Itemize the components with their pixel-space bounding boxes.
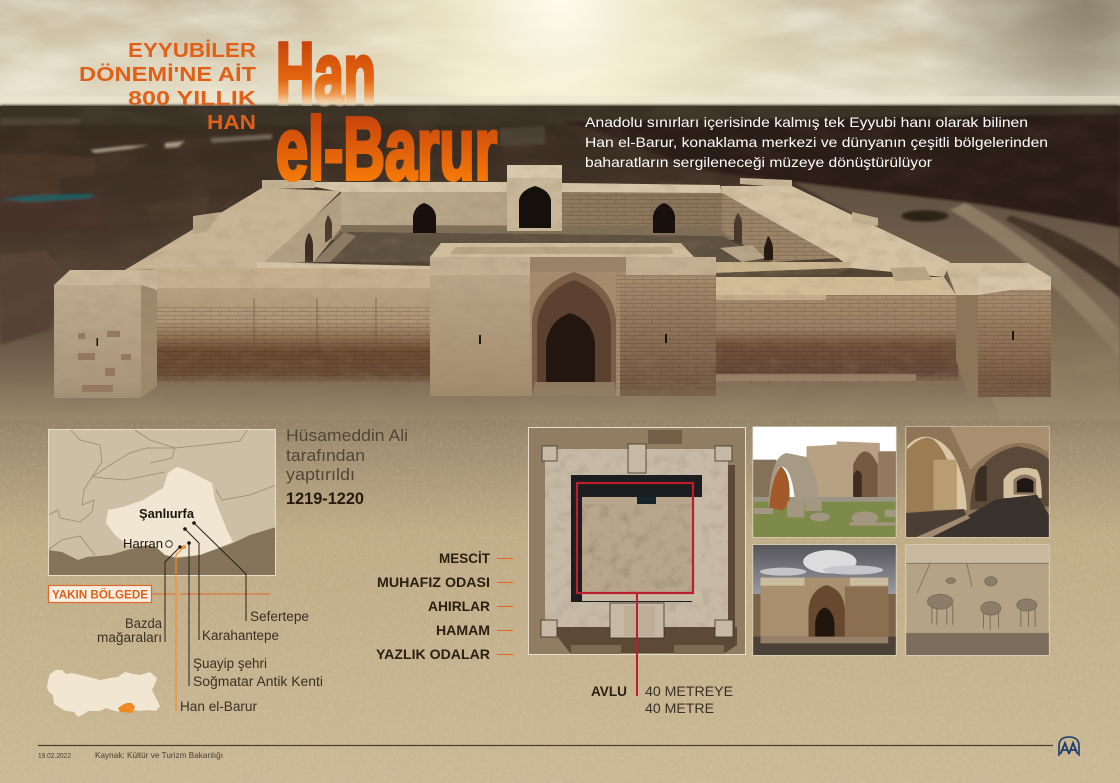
map leader lines and places [97, 521, 323, 714]
icon: AA logo [1059, 737, 1079, 756]
aerial plan photo [528, 427, 746, 655]
intro paragraph: Anadolu sınırları içerisinde kalmış tek Eyyubi hanı olarak bilinen [585, 114, 1028, 130]
courtyard label: AVLU [591, 683, 627, 699]
leader: Sefertepe [192, 521, 309, 624]
leader: Karahantepe: Karahantepe [202, 628, 279, 643]
back gate tower [507, 165, 562, 231]
photo: ruined arch and han exterior [752, 426, 896, 538]
courtyard highlight with leader [577, 483, 693, 696]
site labels with ticks: AHIRLAR [428, 598, 490, 614]
landscape details [0, 105, 1120, 420]
main title [276, 24, 497, 198]
site labels with ticks: YAZLIK ODALAR [376, 646, 490, 662]
map labels [123, 507, 195, 551]
callout: YAKIN BÖLGEDE tag: YAKIN BÖLGEDE [52, 586, 148, 602]
right front roof [716, 262, 956, 295]
site labels with ticks [376, 550, 513, 662]
photo: camel wall carvings [906, 544, 1050, 656]
callout: YAKIN BÖLGEDE tag [48, 586, 270, 602]
left corner tower [54, 270, 157, 398]
leader: Bazda mağaraları: mağaraları [97, 630, 162, 645]
callout: Hüsameddin Ali: 1219-1220 [286, 489, 364, 508]
dark openings: arches and slits [96, 186, 1014, 396]
footer: Kaynak: Kültür ve Turizm Bakanlığı [95, 750, 223, 760]
callout: Hüsameddin Ali [286, 426, 408, 508]
leader: Karahantepe [183, 527, 279, 643]
central gate tower [430, 243, 716, 396]
leader: Han el-Barur: Han el-Barur [180, 699, 258, 714]
photo: vaulted interior [906, 426, 1050, 538]
photo: han facade under clouds [752, 544, 896, 656]
illustration: Han el-Barur caravanserai [0, 165, 1051, 420]
Şanlıurfa province [106, 467, 233, 557]
left wing roof and inner wall [125, 188, 356, 270]
leader: Bazda mağaraları [97, 545, 182, 645]
courtyard label [591, 683, 733, 716]
panel: regional map [48, 429, 276, 576]
footer [38, 746, 1053, 760]
site labels with ticks: MESCİT [439, 550, 490, 566]
leader: Han el-Barur [176, 545, 258, 714]
leader: Şuayip şehri and Soğmatar [187, 541, 323, 689]
right wall [714, 295, 958, 383]
left front roof [125, 268, 430, 288]
title eyebrow: DÖNEMİ'NE AİT [79, 63, 257, 86]
left wall [155, 288, 432, 384]
title eyebrow: 800 YILLIK [128, 87, 256, 110]
leader: Şuayip şehri and Soğmatar: Şuayip şehri [193, 656, 267, 671]
locator map: Turkey [47, 670, 160, 717]
title eyebrow: EYYUBİLER [128, 39, 256, 62]
back wall of courtyard [262, 178, 792, 262]
callout: Hüsameddin Ali: tarafından [286, 446, 365, 465]
title eyebrow [79, 39, 257, 134]
main title: Han [276, 24, 376, 123]
intro paragraph: Han el-Barur, konaklama merkezi ve dünyanın çeşitli bölgelerinden [585, 134, 1048, 150]
callout: Hüsameddin Ali: yaptırıldı [286, 465, 355, 484]
right corner tower [944, 263, 1051, 397]
intro paragraph [585, 114, 1048, 170]
site labels with ticks: HAMAM [436, 622, 490, 638]
map labels: Şanlıurfa [139, 507, 195, 521]
leader: Şuayip şehri and Soğmatar: Soğmatar Antik Kenti [193, 674, 323, 689]
right wing roof and inner wall [720, 186, 950, 277]
site labels with ticks: MUHAFIZ ODASI [377, 574, 490, 590]
main title: el-Barur [276, 99, 497, 198]
leader: Bazda mağaraları: Bazda [125, 616, 162, 631]
courtyard label: 40 METREYE [645, 683, 733, 699]
leader: Sefertepe: Sefertepe [250, 609, 309, 624]
courtyard label: 40 METRE [645, 700, 714, 716]
intro paragraph: baharatların sergileneceği müzeye dönüştürülüyor [585, 154, 932, 170]
map labels: Harran [123, 537, 163, 551]
title eyebrow: HAN [207, 111, 256, 134]
footer: 19.02.2022 [38, 751, 71, 760]
callout: Hüsameddin Ali: Hüsameddin Ali [286, 426, 408, 445]
Şanlıurfa highlight [118, 703, 135, 713]
